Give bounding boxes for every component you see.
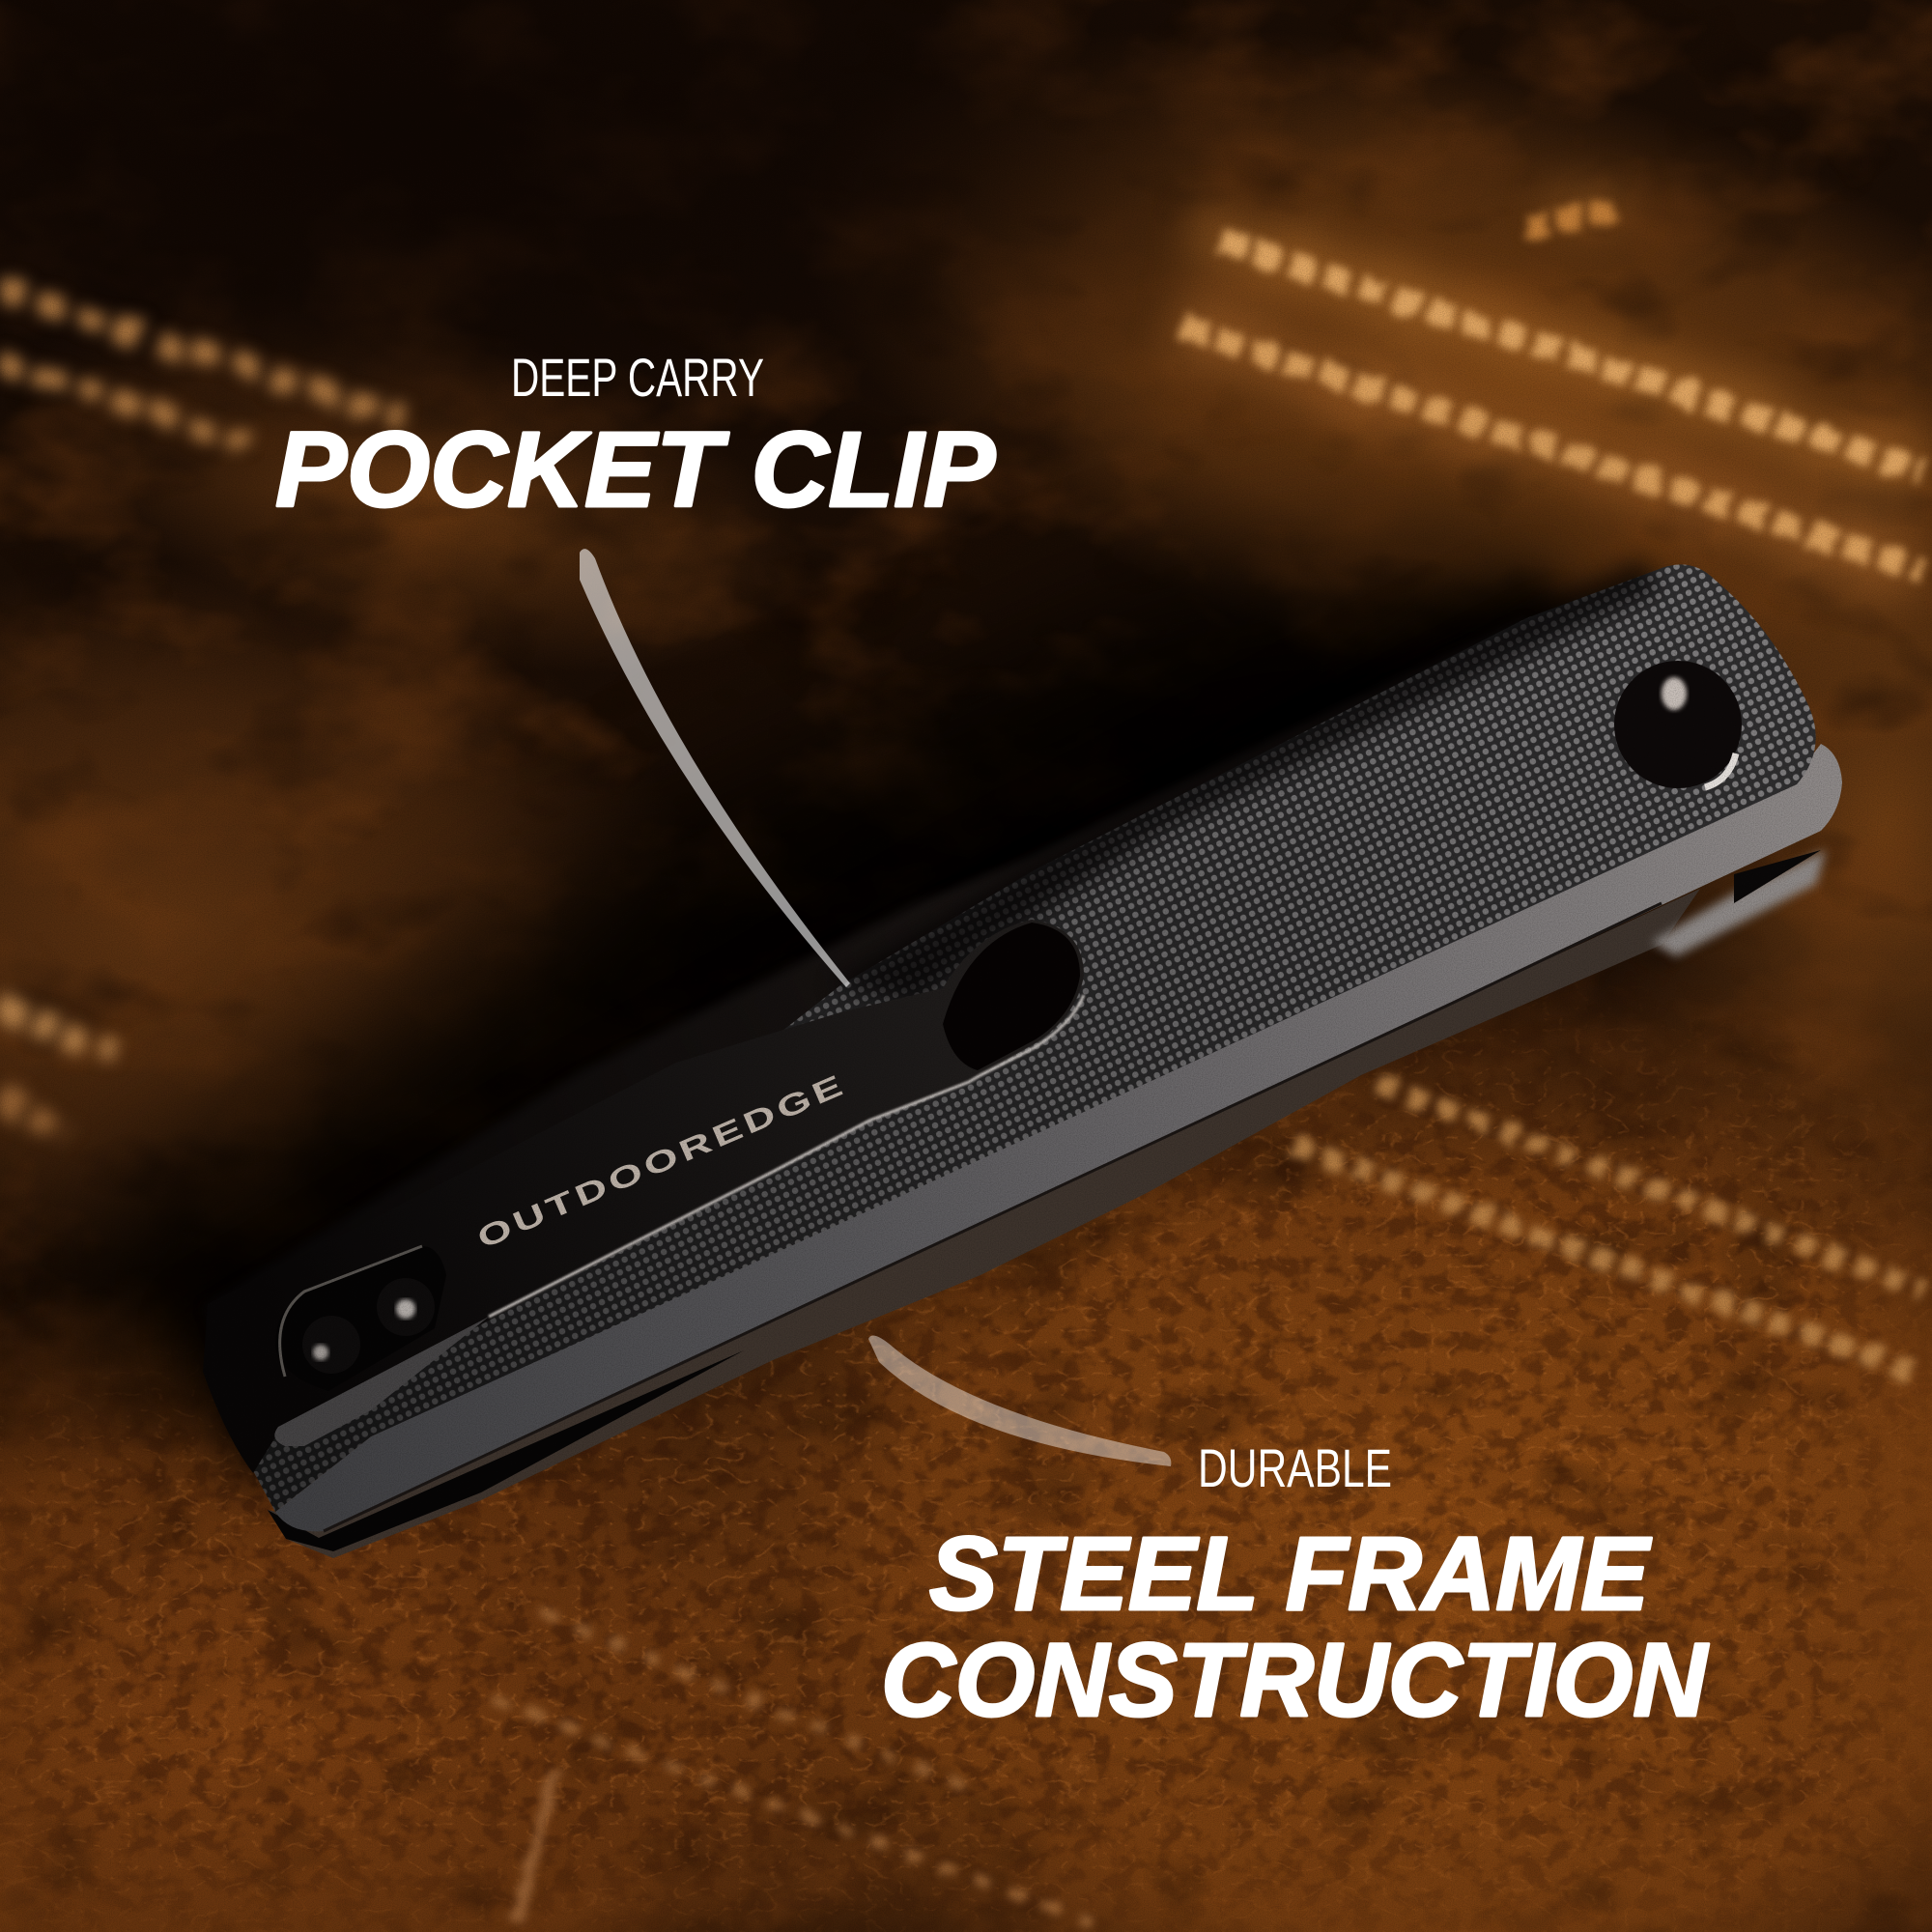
- knife cast shadow: [184, 570, 1584, 1488]
- textured scale face: [242, 564, 1816, 1512]
- subheading: durable: DURABLE: [1198, 1437, 1392, 1498]
- brand logo on clip: OUTDOOREDGE: [472, 1066, 851, 1255]
- plate rim highlight: [280, 1246, 422, 1377]
- wide soft shadow: [77, 541, 1565, 1430]
- tip notch: [1734, 850, 1821, 903]
- heading: steel frame: STEEL FRAME: [929, 1515, 1652, 1632]
- heading: construction: CONSTRUCTION: [881, 1621, 1709, 1738]
- steel frame band: [268, 889, 1700, 1558]
- screw recess plate: [275, 1246, 446, 1391]
- bevel strip: [275, 744, 1842, 1531]
- clip highlight edge: [489, 995, 1084, 1317]
- face shading: [242, 564, 1816, 1512]
- callout line: pocket clip: [580, 549, 850, 987]
- black bottom liner: [268, 1350, 744, 1551]
- clip tip: [274, 1317, 489, 1446]
- heading: deep carry pocket clip: [275, 347, 996, 529]
- pocket clip: [203, 920, 1084, 1473]
- clip screw 1: [302, 1316, 360, 1374]
- bevel dark seam: [324, 903, 1662, 1531]
- knife: [77, 541, 1842, 1558]
- spine shadow: [831, 560, 1662, 1005]
- dark spine side: [203, 618, 1546, 1449]
- clip screw 2: [377, 1278, 435, 1336]
- subheading: deep carry: DEEP CARRY: [511, 347, 764, 408]
- handle silver tip: [1652, 850, 1826, 956]
- pivot screw: [1614, 661, 1742, 788]
- callout line: steel frame: [868, 1336, 1171, 1466]
- heading: durable steel frame construction: [881, 1437, 1709, 1738]
- clip pill recess: [943, 923, 1080, 1070]
- heading: pocket clip: POCKET CLIP: [275, 411, 996, 529]
